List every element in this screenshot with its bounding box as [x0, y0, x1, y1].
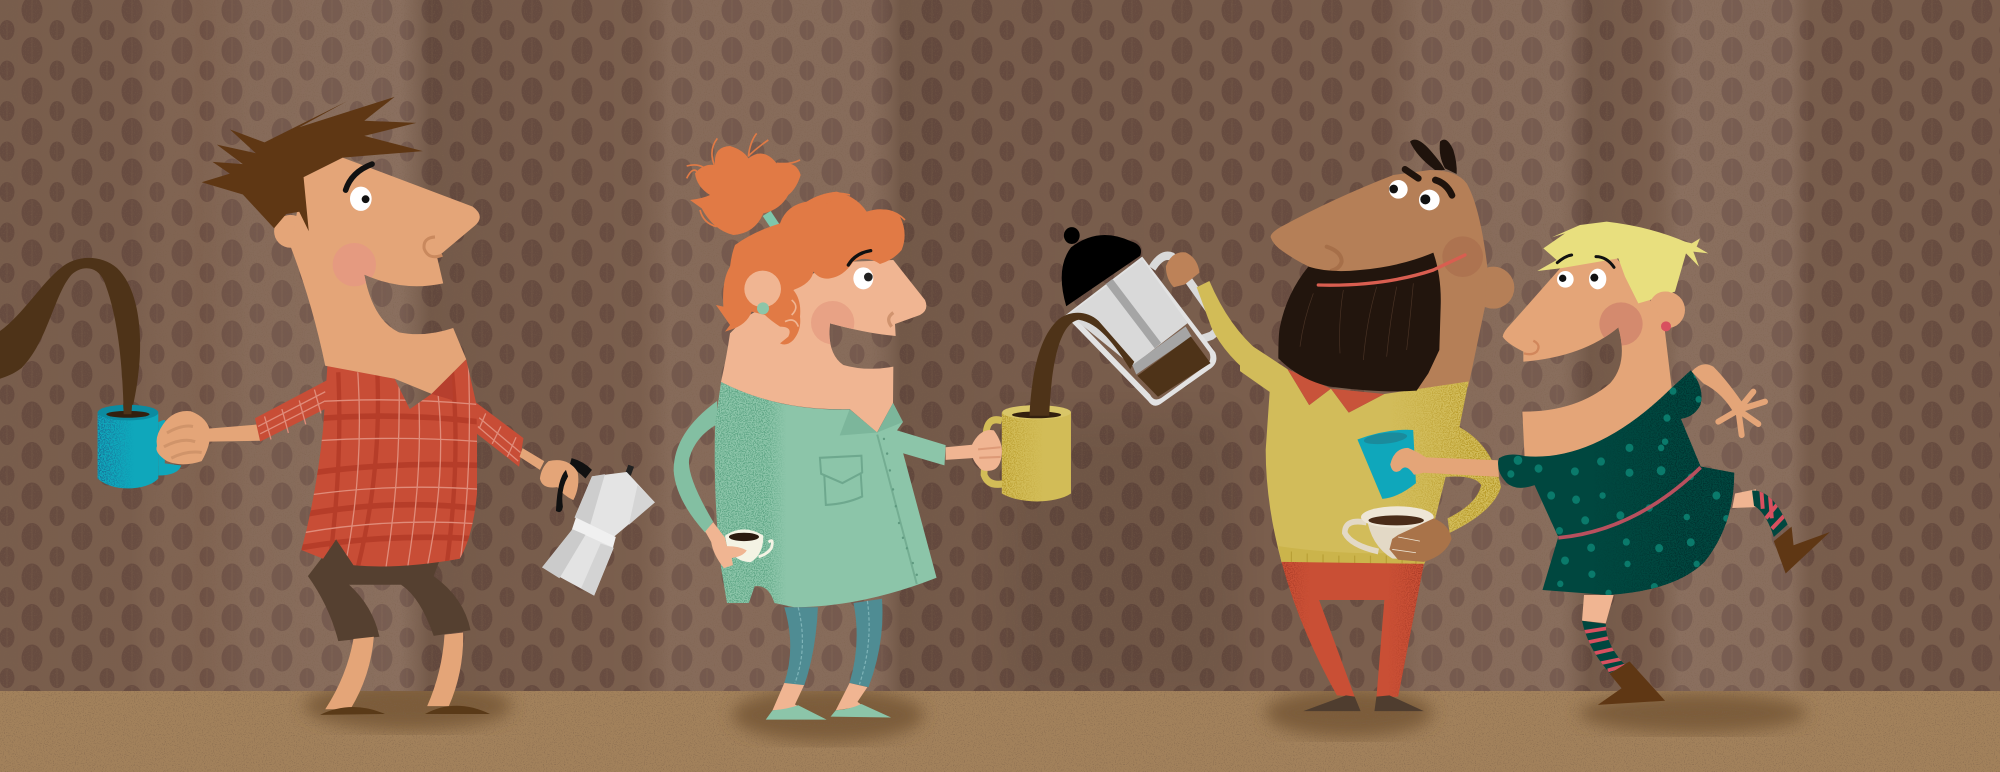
handle: [1152, 256, 1218, 340]
nostril: [1524, 341, 1539, 354]
right arm and sleeve: [476, 403, 544, 470]
curly hair: [716, 192, 905, 344]
french press: [1062, 227, 1218, 406]
back striped sock: [1752, 487, 1788, 537]
head shape: [1271, 170, 1487, 393]
hair bun: [687, 133, 801, 235]
front arm with hand on cup: [1390, 448, 1499, 477]
smile line: [1318, 255, 1465, 285]
floor shadows: [304, 682, 1807, 742]
back leg: [1732, 489, 1756, 508]
bearded man's beard and smile: [1278, 253, 1465, 391]
mint flat shoes: [766, 704, 891, 720]
cheek blush: [811, 301, 854, 344]
bearded man's arm holding press: [1197, 281, 1260, 382]
bearded man's head and neck: [1271, 140, 1514, 393]
small espresso cup and hand: [705, 522, 772, 568]
coffee in press: [1137, 337, 1211, 397]
coffee stream arc: [0, 258, 140, 409]
brown hand holding cup: [1389, 518, 1452, 562]
coffee stream pouring: [1029, 313, 1134, 416]
shoes: [320, 706, 490, 715]
plaid shirt: [299, 359, 481, 567]
raised back arm with hand: [1692, 364, 1765, 435]
eyebrow: [848, 251, 871, 265]
blonde hair: [1537, 222, 1708, 303]
plunger rod: [1106, 279, 1161, 348]
jeans: [784, 599, 882, 687]
left hand gripping mug: [156, 411, 210, 464]
left arm: [674, 401, 717, 533]
eye: [350, 187, 372, 211]
plunger filter: [1132, 326, 1192, 374]
hair tie: [763, 211, 779, 229]
front boot: [1598, 661, 1665, 705]
figure: bearded man in yellow sweater: [1240, 338, 1505, 711]
figure: man in red plaid shirt: [0, 97, 655, 715]
right hand with pot handle: [540, 460, 578, 512]
press body: [1065, 257, 1216, 406]
orange hair, face and neck: [687, 133, 926, 432]
hem ribbing: [1278, 546, 1430, 568]
blonde woman's head, neck and raised arm: [1503, 222, 1765, 458]
cheek blush: [333, 243, 376, 286]
button placket: [877, 435, 917, 584]
front striped sock: [1582, 621, 1626, 673]
face and neck: [1503, 258, 1672, 458]
hand on press handle: [1166, 252, 1199, 287]
dark shoes: [1303, 695, 1424, 711]
beige coffee cup: [1345, 506, 1434, 559]
lid: [1062, 235, 1141, 306]
nostril: [1327, 247, 1342, 271]
buttons: [883, 438, 918, 576]
curl highlights on neck: [785, 300, 798, 327]
figure: woman in mint shirt, lower body and back arm: [674, 401, 891, 720]
mint shirt: [711, 382, 937, 609]
floor: [0, 682, 2000, 772]
ear: [1472, 267, 1514, 309]
black beard: [1278, 253, 1441, 391]
eyebrows: [1405, 169, 1452, 195]
figure: blonde woman in teal dress: [1582, 487, 1830, 705]
nostril: [889, 313, 893, 327]
neck and face: [274, 158, 480, 394]
blue mug: [98, 403, 181, 494]
eyes: [1557, 269, 1606, 289]
cheek blush: [1442, 236, 1483, 277]
feet: [772, 683, 867, 710]
face and neck: [721, 260, 926, 432]
earring: [757, 302, 769, 314]
figure: woman in mint shirt, torso, mug and french press: [705, 227, 1260, 609]
front leg: [1582, 595, 1614, 623]
ear: [1648, 292, 1685, 328]
moka pot: [542, 458, 655, 596]
earring: [1661, 321, 1671, 331]
eyebrows: [1557, 255, 1614, 267]
eye: [853, 267, 873, 289]
nostril: [424, 237, 442, 257]
eyebrow: [346, 164, 372, 190]
yellow sweater: [1240, 338, 1505, 568]
upper glass: [1069, 259, 1188, 366]
forearm: [946, 444, 978, 460]
dress dots: [1507, 372, 1730, 596]
trousers: [308, 539, 471, 641]
waist belt: [1558, 467, 1701, 538]
ear front: [1651, 291, 1684, 327]
right sleeve: [897, 430, 946, 465]
cheek blush: [1599, 302, 1643, 346]
teal polka dot dress: [1497, 369, 1738, 597]
beard hair strokes: [1300, 283, 1413, 360]
hand holding mug: [971, 430, 1002, 471]
back boot: [1774, 527, 1830, 573]
legs: [325, 632, 463, 709]
red trousers: [1282, 562, 1424, 699]
blonde woman's dress and front arm: [1390, 369, 1738, 597]
eyes: [1389, 180, 1440, 210]
spiky brown hair: [202, 97, 423, 231]
ear: [744, 271, 781, 307]
chest pocket: [820, 456, 862, 505]
blue tumbler: [1357, 430, 1416, 499]
yellow mug: [984, 405, 1071, 504]
collar: [840, 403, 903, 435]
hair tufts: [1410, 140, 1457, 174]
shirt collar: [1287, 369, 1384, 413]
left arm and rolled sleeve: [208, 380, 327, 442]
